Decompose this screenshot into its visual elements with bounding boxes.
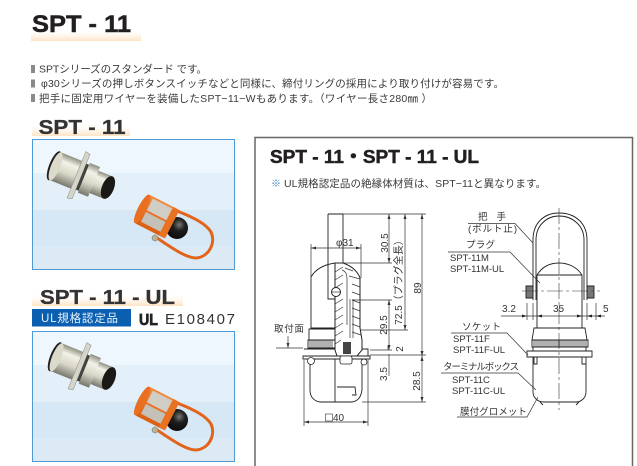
note: UL規格認定品の絶縁体材質は、SPT−11と異なります。 (284, 177, 546, 190)
labels: vertical dimensions: 28.5 (412, 371, 423, 391)
callout: handle: (ボルト止) (468, 223, 517, 235)
title: SPT - 11 (32, 11, 131, 38)
drawing: front view (522, 208, 600, 410)
cross-section hatch body (331, 263, 362, 356)
callout: handle: 把 手 (478, 211, 506, 223)
dimensions: front view (501, 303, 609, 320)
dimensions: front view: 3.2 (502, 304, 516, 315)
callout: terminal box: SPT-11C-UL (452, 386, 505, 397)
callout: socket: SPT-11F (453, 334, 490, 345)
callout: grommet: 膜付グロメット (460, 406, 527, 418)
description text block: φ30シリーズの押しボタンスイッチなどと同様に、締付リングの採用により取り付けが容易です。 (41, 77, 504, 90)
handle (533, 213, 587, 300)
labels: vertical dimensions: 30.5 (380, 233, 391, 253)
terminal box (310, 359, 362, 402)
icon: plug (40, 141, 123, 213)
label: UL certified: UL規格認定品 (41, 311, 118, 325)
callout: terminal box: SPT-11C (452, 375, 490, 386)
callout: grommet (457, 397, 538, 418)
labels: vertical dimensions (379, 233, 424, 391)
callout: terminal box (441, 362, 536, 397)
dimensions: side view (274, 214, 426, 426)
plug outline (311, 263, 335, 328)
centre lines (522, 208, 600, 410)
icon: orange cap UL (131, 385, 213, 450)
label: mounting face (274, 324, 304, 348)
callout: plug: SPT-11M (450, 253, 489, 264)
dimensions: front view: 5 (603, 304, 609, 315)
label: 40 (326, 413, 345, 424)
callout: socket: SPT-11F-UL (453, 345, 505, 356)
heading: SPT-11: SPT - 11 (38, 117, 126, 139)
callout: socket (451, 322, 528, 356)
label: UL certified (32, 309, 131, 326)
panel heading: SPT - 11・SPT - 11 - UL (270, 147, 479, 167)
icon: orange cap (131, 193, 213, 258)
callout: socket: ソケット (462, 322, 501, 333)
plug body (537, 263, 582, 328)
labels: vertical dimensions: 89 (413, 282, 424, 294)
drawing: cross-section side view (303, 214, 370, 402)
labels: vertical dimensions: 2 (395, 346, 406, 352)
dimensions: front view: 35 (553, 304, 565, 315)
description text block (31, 62, 504, 105)
socket (527, 328, 592, 405)
icon: plug UL (41, 332, 124, 404)
certificate number: E108407 (165, 311, 235, 328)
labels: vertical dimensions: 29.5 (379, 315, 390, 335)
photo panel: SPT-11-UL (32, 332, 234, 462)
labels: vertical dimensions: 72.5（プラグ全長） (392, 235, 405, 325)
callout: plug (448, 239, 540, 283)
note: ※ (271, 179, 281, 190)
callout: plug: プラグ (466, 239, 495, 251)
callout: plug: SPT-11M-UL (450, 264, 504, 275)
bolts (526, 286, 594, 298)
label: phi 31: φ31 (336, 238, 354, 249)
icon: UL mark: UL (139, 312, 158, 329)
handle outline (328, 214, 343, 299)
panel: dimension drawing (255, 138, 632, 466)
label: 40: 40 (333, 413, 345, 424)
label: mounting face: 取付面 (274, 324, 304, 335)
description text block: 把手に固定用ワイヤーを装備したSPT−11−Wもあります。（ワイヤー長さ280㎜ ） (39, 92, 432, 105)
labels: vertical dimensions: 3.5 (379, 367, 390, 381)
description text block: SPTシリーズのスタンダード です。 (39, 62, 207, 76)
photo panel: SPT-11 (32, 140, 234, 270)
ring and socket (303, 329, 370, 359)
heading: SPT-11-UL: SPT - 11 - UL (40, 287, 175, 309)
callout: handle (468, 211, 533, 243)
callout: terminal box: ターミナルボックス (443, 362, 519, 373)
